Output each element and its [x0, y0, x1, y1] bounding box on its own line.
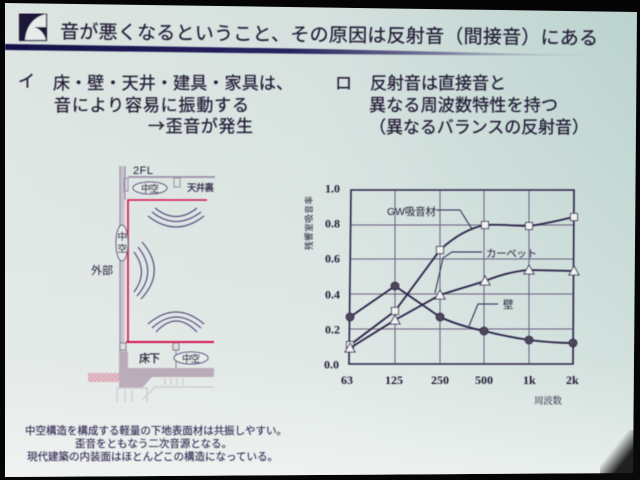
callout: 中空 ceiling: [133, 182, 167, 195]
grid: [350, 190, 574, 364]
x axis values: 2k: [566, 373, 579, 387]
callout: 中空 underfloor: 中空: [182, 353, 200, 365]
note text: [25, 424, 287, 463]
y axis values: 0.2: [325, 322, 340, 336]
x axis values: 1k: [523, 373, 536, 387]
red interior finish lines: [126, 200, 214, 342]
icon: logo: [20, 14, 46, 40]
header: [5, 14, 598, 56]
label: GW吸音材 with leader: GW吸音材: [387, 205, 436, 218]
text block: point イ: 床・壁・天井・建具・家具は、: [53, 74, 293, 93]
line chart: absorption coefficient: [304, 182, 579, 407]
y axis values: 0.8: [325, 216, 340, 230]
series: carpet: [345, 265, 579, 352]
y axis values: [324, 182, 340, 372]
label: 2FL: 2FL: [133, 165, 153, 177]
series: GW absorber: [346, 214, 578, 348]
text block: point ロ: （異なるバランスの反射音）: [369, 118, 589, 137]
label: 壁 with leader: [469, 299, 514, 326]
header rule: [5, 44, 585, 56]
text block: point ロ: ロ: [335, 74, 352, 93]
callout: 中空 underfloor: [174, 352, 208, 365]
y axis values: 0.0: [324, 358, 339, 372]
x axis values: 250: [431, 373, 449, 387]
plot frame: [349, 190, 574, 364]
y axis values: 1.0: [325, 182, 340, 196]
text block: point ロ: 異なる周波数特性を持つ: [369, 96, 558, 115]
text block: point イ: イ: [18, 72, 35, 91]
y axis values: 0.4: [325, 288, 340, 302]
note text: 中空構造を構成する軽量の下地表面材は共振しやすい。: [25, 424, 287, 437]
note text: 現代建築の内装面はほとんどこの構造になっている。: [27, 450, 278, 463]
series: wall: [346, 282, 577, 347]
label: カーペット with leader: [435, 248, 537, 293]
text block: point イ: →歪音が発生: [148, 112, 253, 137]
diagram: wall section: [88, 165, 215, 402]
floor and foundation: [88, 343, 214, 402]
callout: 中空 ceiling: 中空: [141, 183, 159, 195]
label: 壁 with leader: 壁: [503, 299, 514, 311]
x axis values: 500: [475, 373, 493, 387]
text block: point ロ: [335, 74, 589, 137]
label: カーペット with leader: カーペット: [486, 248, 537, 260]
ceiling and wall structure: [120, 166, 215, 351]
sound waves: [134, 208, 204, 332]
callout: 中空 wall: 中: [118, 231, 127, 243]
x axis values: 63: [341, 373, 353, 387]
label: GW吸音材 with leader: [387, 205, 472, 229]
text block: point ロ: 反射音は直接音と: [370, 74, 506, 93]
callout: 中空 wall: [116, 225, 128, 261]
label: 外部: 外部: [91, 264, 113, 277]
callout: 中空 wall: 空: [118, 244, 127, 255]
label: 床下: 床下: [139, 352, 160, 365]
text block: point イ: [18, 72, 293, 137]
note text: 歪音をともなう二次音源となる。: [75, 437, 232, 450]
y axis title: 残響室吸音率: [304, 196, 314, 250]
y axis values: 0.6: [325, 252, 340, 266]
x axis title: 周波数: [534, 395, 562, 407]
x axis values: [341, 373, 579, 387]
x axis values: 125: [385, 373, 403, 387]
text block: point イ: 音により容易に振動する: [54, 96, 249, 115]
title: 音が悪くなるということ、その原因は反射音（間接音）にある: [60, 21, 598, 50]
label: 天井裏: 天井裏: [187, 182, 214, 194]
